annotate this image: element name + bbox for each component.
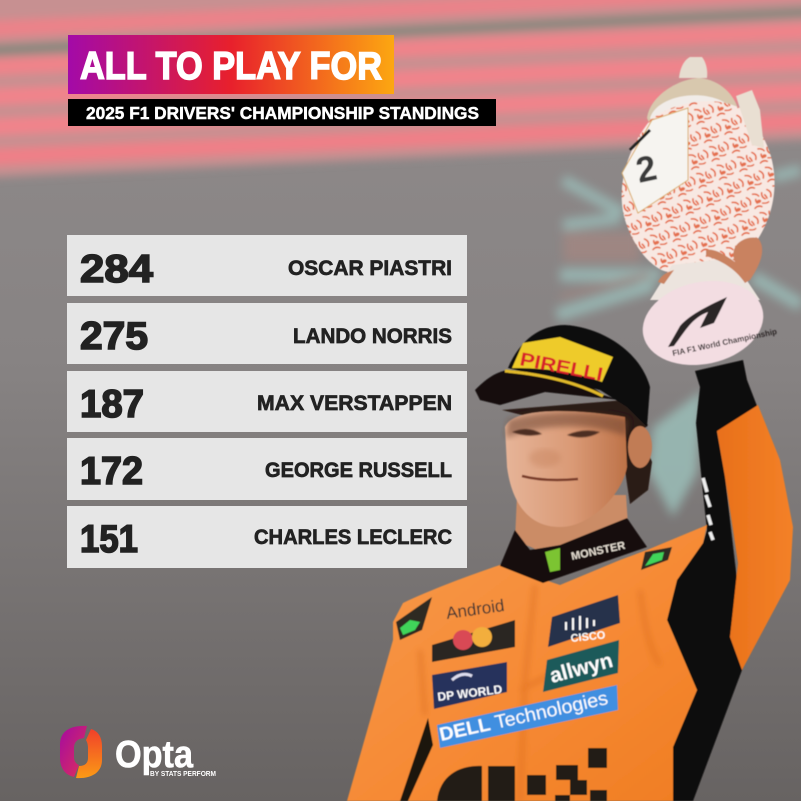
vase body [622,101,775,272]
raised arm [667,360,793,801]
collar: MONSTER [570,540,626,563]
stem [650,258,760,300]
Opta logo: Opta [115,734,194,776]
standings table [67,235,467,568]
Opta logo: BY STATS PERFORM [150,769,216,778]
row: George Russell [67,438,467,500]
sponsor: Allwyn [543,640,619,692]
sponsor: DP World [432,662,507,709]
trophy [622,57,778,376]
base with F1 logo [635,270,778,376]
Pirelli patch [512,337,613,386]
face [505,411,627,527]
row: Charles Leclerc: CHARLES LECLERC [254,526,452,549]
row: Lando Norris [67,303,467,364]
shoulder patches [396,597,432,640]
cap [475,325,650,427]
sponsor: Mastercard [432,620,515,662]
row: Lando Norris: 275 [80,315,148,358]
Opta logo [60,726,216,778]
label with number 2: 2 [632,147,660,191]
neck [515,495,628,560]
base with F1 logo: FIA F1 World Championship [672,327,778,358]
row: Oscar Piastri: OSCAR PIASTRI [288,257,452,280]
racing suit [347,525,707,801]
title: ALL TO PLAY FOR [68,35,394,94]
sponsor: Dell Technologies: DELL Technologies [438,688,610,746]
sponsor: Cisco [548,595,620,647]
driver photo [347,325,793,801]
logo mark [60,726,87,777]
row: Oscar Piastri [67,235,467,296]
row: George Russell: 172 [80,450,143,493]
sponsor: Android: Android [445,596,506,623]
row: George Russell: GEORGE RUSSELL [265,459,452,482]
collar [500,518,647,583]
row: Charles Leclerc: 151 [80,518,138,561]
vase handle [736,90,764,148]
label with number 2 [622,108,688,213]
title: ALL TO PLAY FOR: ALL TO PLAY FOR [80,45,382,88]
row: Max Verstappen: 187 [80,383,144,426]
sponsor: Allwyn: allwyn [547,649,615,688]
subtitle: 2025 F1 DRIVERS' CHAMPIONSHIP STANDINGS [86,103,479,123]
row: Max Verstappen [67,371,467,432]
subtitle [68,99,496,126]
row: Lando Norris: LANDO NORRIS [293,325,452,348]
sponsor: Cisco: CISCO [570,629,606,645]
sponsor: DP World: DP WORLD [437,682,503,704]
hair [502,400,652,504]
Pirelli patch: PIRELLI [518,349,605,386]
row: Max Verstappen: MAX VERSTAPPEN [257,392,452,415]
finial and lid [679,57,707,78]
flag in background [557,170,801,517]
row: Oscar Piastri: 284 [80,248,153,291]
hand [658,237,762,284]
row: Charles Leclerc [67,506,467,568]
